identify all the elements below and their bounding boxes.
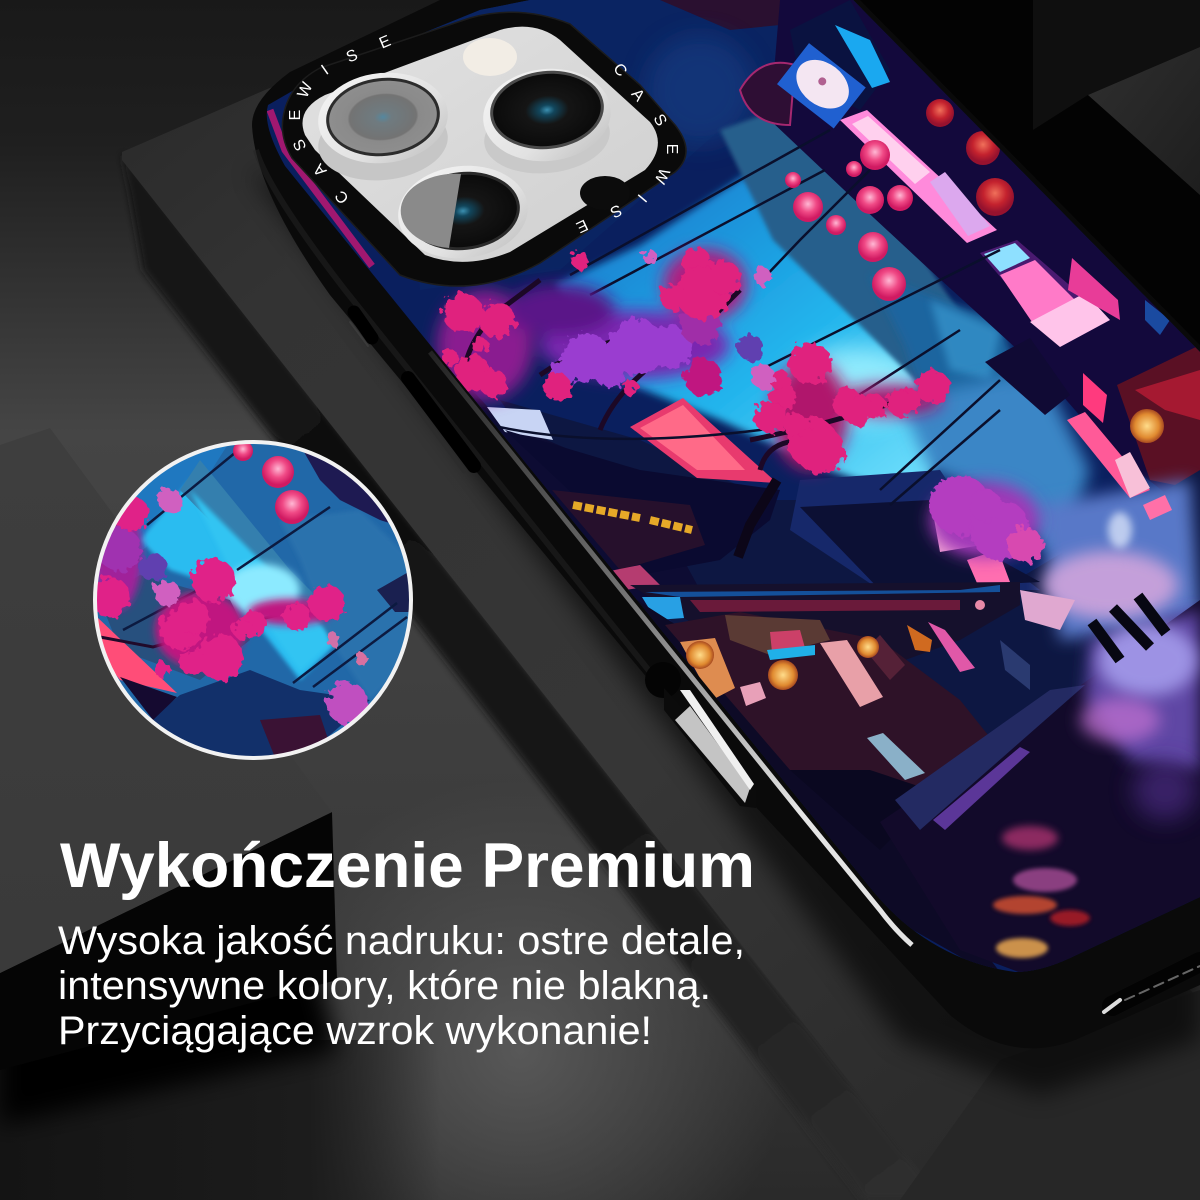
ring logotype: CASEWISE: S <box>344 47 360 66</box>
phone case body <box>252 0 1200 1048</box>
ring logotype: CASEWISE: E <box>287 110 304 120</box>
ring logotype: CASEWISE: A <box>310 160 330 179</box>
body copy: Wysoka jakość nadruku: ostre detale, <box>58 919 745 963</box>
ring logotype: CASEWISE <box>287 33 680 236</box>
ring logotype: CASEWISE: S <box>650 111 670 129</box>
ring logotype: CASEWISE: W <box>295 79 317 101</box>
glossy edge highlight <box>430 352 912 945</box>
camera lens 1 <box>314 66 452 187</box>
ring logotype: CASEWISE: C <box>332 187 353 207</box>
camera glass plate <box>302 27 658 262</box>
lidar sensor <box>580 176 630 210</box>
ring logotype: CASEWISE: C <box>609 60 630 80</box>
ring logotype: CASEWISE: E <box>663 144 680 154</box>
side button: silver action button <box>645 662 756 808</box>
camera lens 2 <box>479 63 615 179</box>
camera flash <box>463 38 517 76</box>
ring logotype: CASEWISE: E <box>573 216 590 236</box>
camera island: black ring <box>282 12 686 286</box>
ring logotype: CASEWISE: I <box>634 191 650 205</box>
phone drop shadow <box>250 170 1200 1095</box>
zoom detail circle <box>90 441 412 770</box>
body copy <box>58 919 745 1053</box>
camera lens 3 <box>394 159 532 265</box>
ring logotype: CASEWISE: A <box>628 86 648 105</box>
ring logotype: CASEWISE: S <box>607 201 624 221</box>
body copy: Przyciągające wzrok wykonanie! <box>58 1009 652 1053</box>
body copy: intensywne kolory, które nie blakną. <box>58 964 711 1008</box>
side button: silent switch <box>350 312 372 346</box>
charging port <box>1104 962 1200 1012</box>
printed artwork: neon street <box>250 0 1200 985</box>
ring logotype: CASEWISE: I <box>319 62 332 79</box>
heading: Wykończenie Premium <box>60 831 755 901</box>
side button: volume <box>400 378 474 472</box>
ring logotype: CASEWISE: W <box>650 165 672 187</box>
ring logotype: CASEWISE: S <box>290 136 310 153</box>
ring logotype: CASEWISE: E <box>377 33 393 52</box>
case side sheen <box>256 150 650 672</box>
